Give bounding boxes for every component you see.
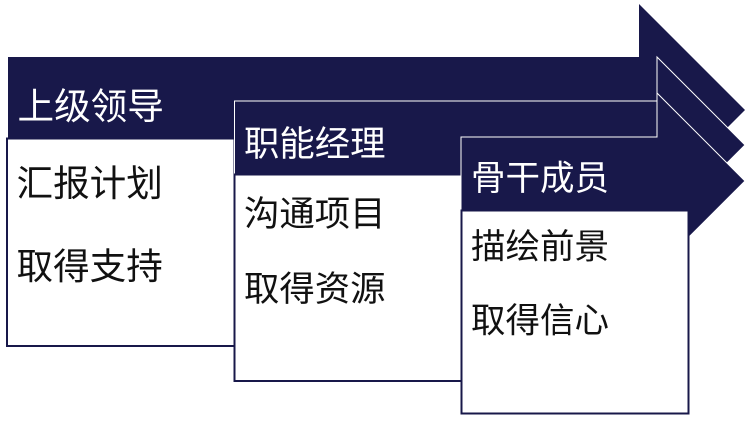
panel: 上级领导 body xyxy=(7,138,234,346)
panel: 骨干成员 body xyxy=(462,210,688,414)
heading: 上级领导: 上级领导 xyxy=(18,86,164,127)
arrow: 骨干成员 xyxy=(461,93,745,250)
text: 汇报计划: 汇报计划 xyxy=(16,163,163,204)
text: 沟通项目: 沟通项目 xyxy=(244,194,386,234)
text: 取得支持: 取得支持 xyxy=(16,246,163,287)
heading: 骨干成员: 骨干成员 xyxy=(471,160,609,198)
heading: 职能经理: 职能经理 xyxy=(244,124,386,164)
panel: 职能经理 body xyxy=(234,174,462,381)
text: 取得信心: 取得信心 xyxy=(471,302,609,340)
text: 取得资源: 取得资源 xyxy=(244,269,386,309)
arrow: 上级领导 xyxy=(8,4,745,216)
arrow: 职能经理 xyxy=(234,57,745,233)
text: 描绘前景: 描绘前景 xyxy=(471,228,609,266)
